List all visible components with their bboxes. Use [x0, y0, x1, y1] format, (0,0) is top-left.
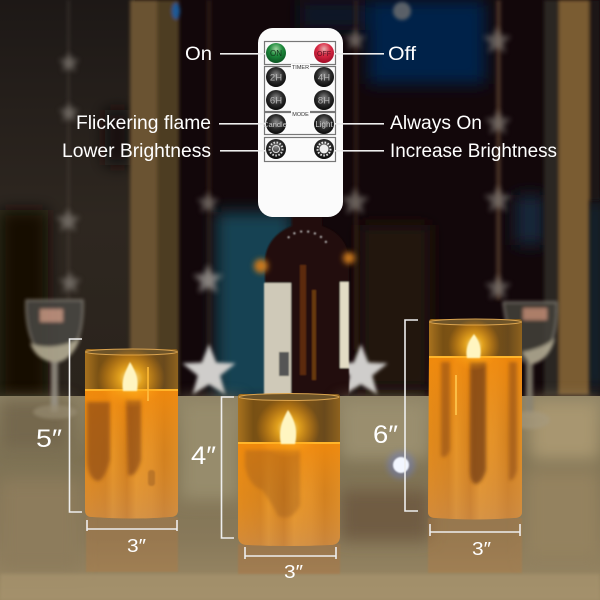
remote control: TIMER: [292, 65, 309, 71]
dimension: width of 6 inch candle: 3″: [472, 539, 492, 559]
button: on: ON: [270, 49, 282, 58]
button: 6H: [266, 90, 286, 110]
callout: On: [185, 44, 266, 65]
dimension: height 5 inch: [36, 339, 82, 512]
button: increase brightness: [314, 139, 334, 159]
dimension: height 4 inch: 4″: [191, 442, 216, 470]
button: lower brightness: [266, 139, 286, 159]
dimension: height 4 inch: [191, 397, 234, 538]
candle: 5 inch: [85, 348, 178, 572]
right wine glass: [503, 302, 557, 429]
dimension: width of 5 inch candle: [87, 520, 177, 556]
button: off: OFF: [317, 51, 331, 58]
button: 6H: 6H: [270, 96, 282, 106]
button: light: Light: [315, 120, 333, 129]
button: on: [266, 43, 286, 63]
button: candle: [263, 114, 287, 134]
callout: Increase Brightness: Increase Brightness: [390, 141, 557, 162]
button: 8H: 8H: [318, 96, 330, 106]
dimension: width of 4 inch candle: [245, 547, 336, 582]
glass top: [85, 349, 178, 392]
table top: [0, 396, 600, 600]
wax body: [85, 390, 178, 518]
callout: Off: Off: [388, 44, 417, 65]
button: 2H: 2H: [270, 72, 282, 84]
dimension: height 6 inch: 6″: [373, 421, 398, 449]
dimension: width of 5 inch candle: 3″: [127, 536, 147, 556]
callout: On: On: [185, 44, 212, 65]
dimension: width of 6 inch candle: [430, 524, 520, 559]
callout: Off: [335, 44, 417, 65]
remote control: [258, 28, 343, 217]
remote control: MODE: [292, 112, 309, 118]
flame: [97, 348, 165, 408]
button: off: [314, 43, 334, 63]
button: 4H: [314, 67, 334, 87]
button: candle: Candle: [263, 120, 287, 129]
callout: Flickering flame: Flickering flame: [76, 113, 211, 134]
candle: 6 inch: [428, 319, 522, 573]
hanging stars: [56, 26, 512, 299]
wine bottle: [254, 217, 355, 396]
callout: Always On: Always On: [390, 113, 482, 134]
dimension: width of 4 inch candle: 3″: [284, 562, 304, 582]
star ornaments on table: [182, 344, 388, 395]
dimension: height 5 inch: 5″: [36, 425, 62, 453]
button: 4H: 4H: [318, 72, 330, 84]
button: light: [314, 114, 334, 134]
blue light reflection: [387, 451, 415, 479]
left wine glass: [26, 300, 83, 419]
button: 2H: [266, 67, 286, 87]
candle: 4 inch: [238, 394, 340, 574]
button: 8H: [314, 90, 334, 110]
callout: Lower Brightness: Lower Brightness: [62, 141, 211, 162]
dimension: height 6 inch: [373, 320, 418, 511]
reflection: [86, 517, 178, 572]
